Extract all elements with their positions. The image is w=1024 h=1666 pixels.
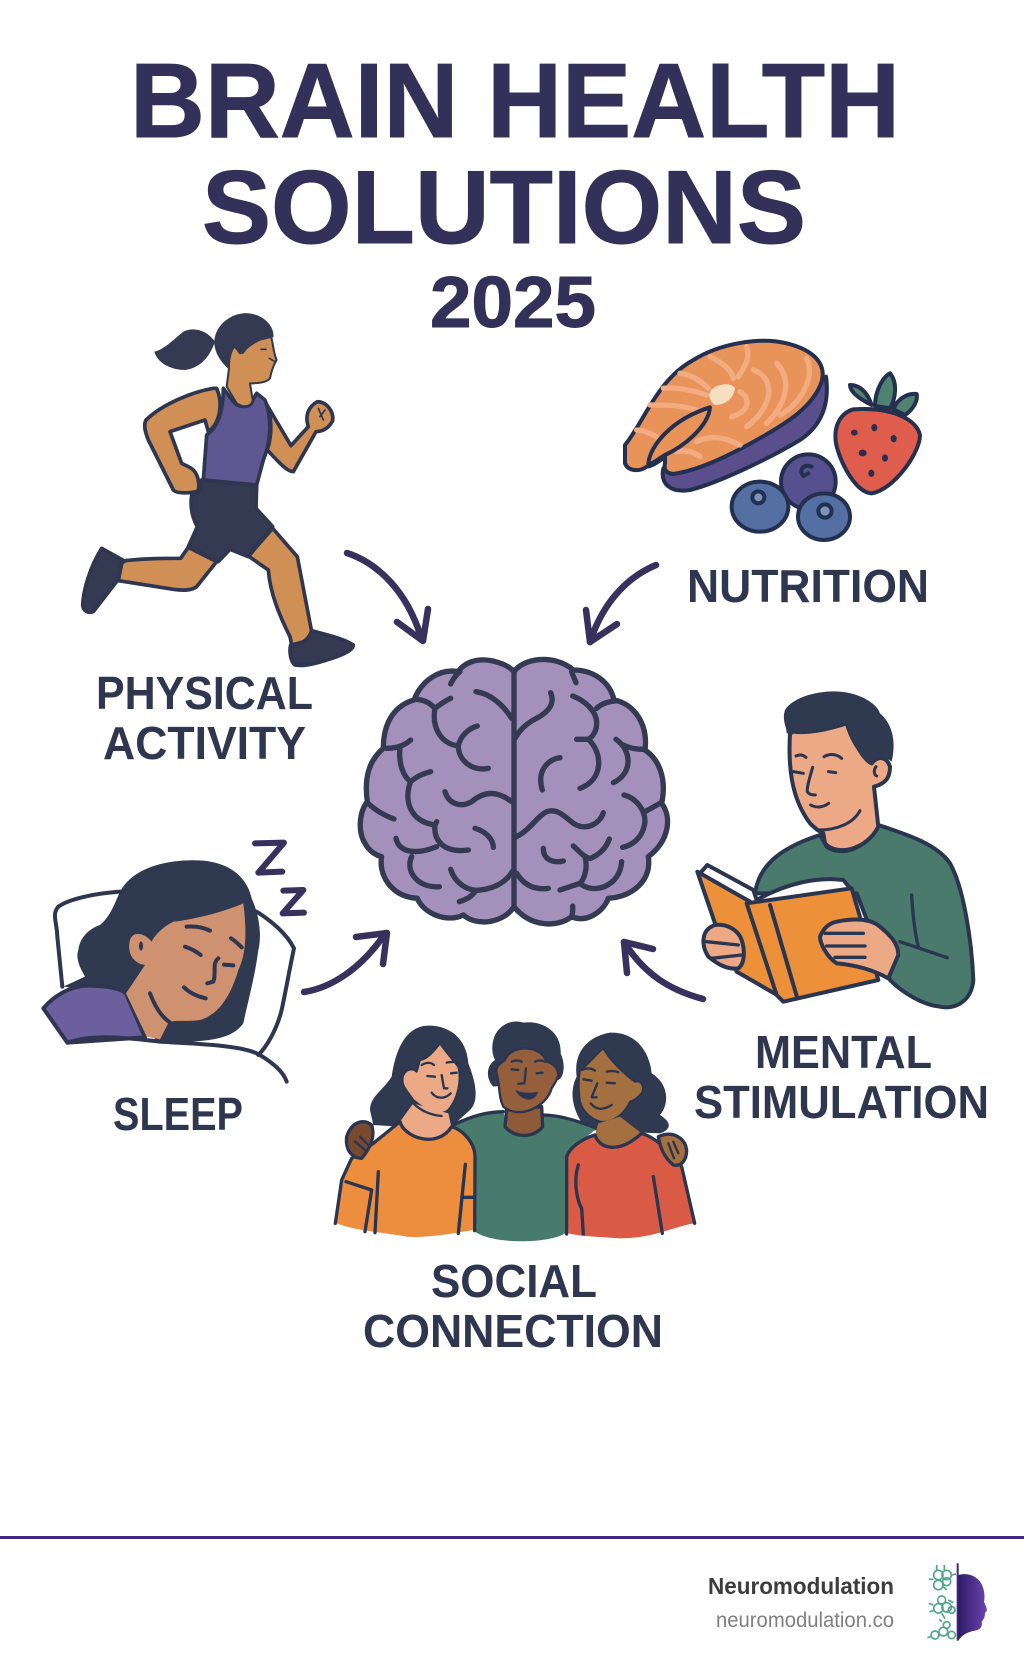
label: physical activity xyxy=(96,667,313,769)
label: sleep: SLEEP xyxy=(113,1088,243,1140)
label: social connection: SOCIAL xyxy=(431,1255,597,1307)
footer brand text: neuromodulation.co xyxy=(716,1609,894,1632)
icon: runner xyxy=(83,314,353,665)
title: SOLUTIONS xyxy=(202,150,806,266)
label: social connection: CONNECTION xyxy=(363,1305,663,1357)
label: mental stimulation: MENTAL xyxy=(755,1026,932,1078)
icon: nutrition foods xyxy=(625,341,920,540)
icon: neuromodulation logo xyxy=(927,1563,987,1641)
label: mental stimulation: STIMULATION xyxy=(694,1076,989,1128)
icon: three friends xyxy=(335,1022,695,1241)
title xyxy=(130,42,900,343)
footer divider xyxy=(0,1536,1024,1539)
label: physical activity: ACTIVITY xyxy=(103,717,306,769)
icon: sleeping woman xyxy=(43,843,304,1082)
footer brand text xyxy=(708,1573,894,1632)
icon: person reading xyxy=(697,691,973,1007)
arrow: sleep to brain xyxy=(304,933,387,992)
title: 2025 xyxy=(430,263,596,343)
arrow: mental stimulation to brain xyxy=(624,942,703,999)
label: physical activity: PHYSICAL xyxy=(96,667,313,719)
icon: brain xyxy=(360,659,668,924)
arrow: physical activity to brain xyxy=(347,553,428,641)
label: nutrition: NUTRITION xyxy=(687,560,929,612)
label: social connection xyxy=(363,1255,663,1357)
title: BRAIN HEALTH xyxy=(130,42,900,160)
footer brand text: Neuromodulation xyxy=(708,1573,894,1599)
label: mental stimulation xyxy=(694,1026,989,1128)
arrow: nutrition to brain xyxy=(586,565,656,642)
